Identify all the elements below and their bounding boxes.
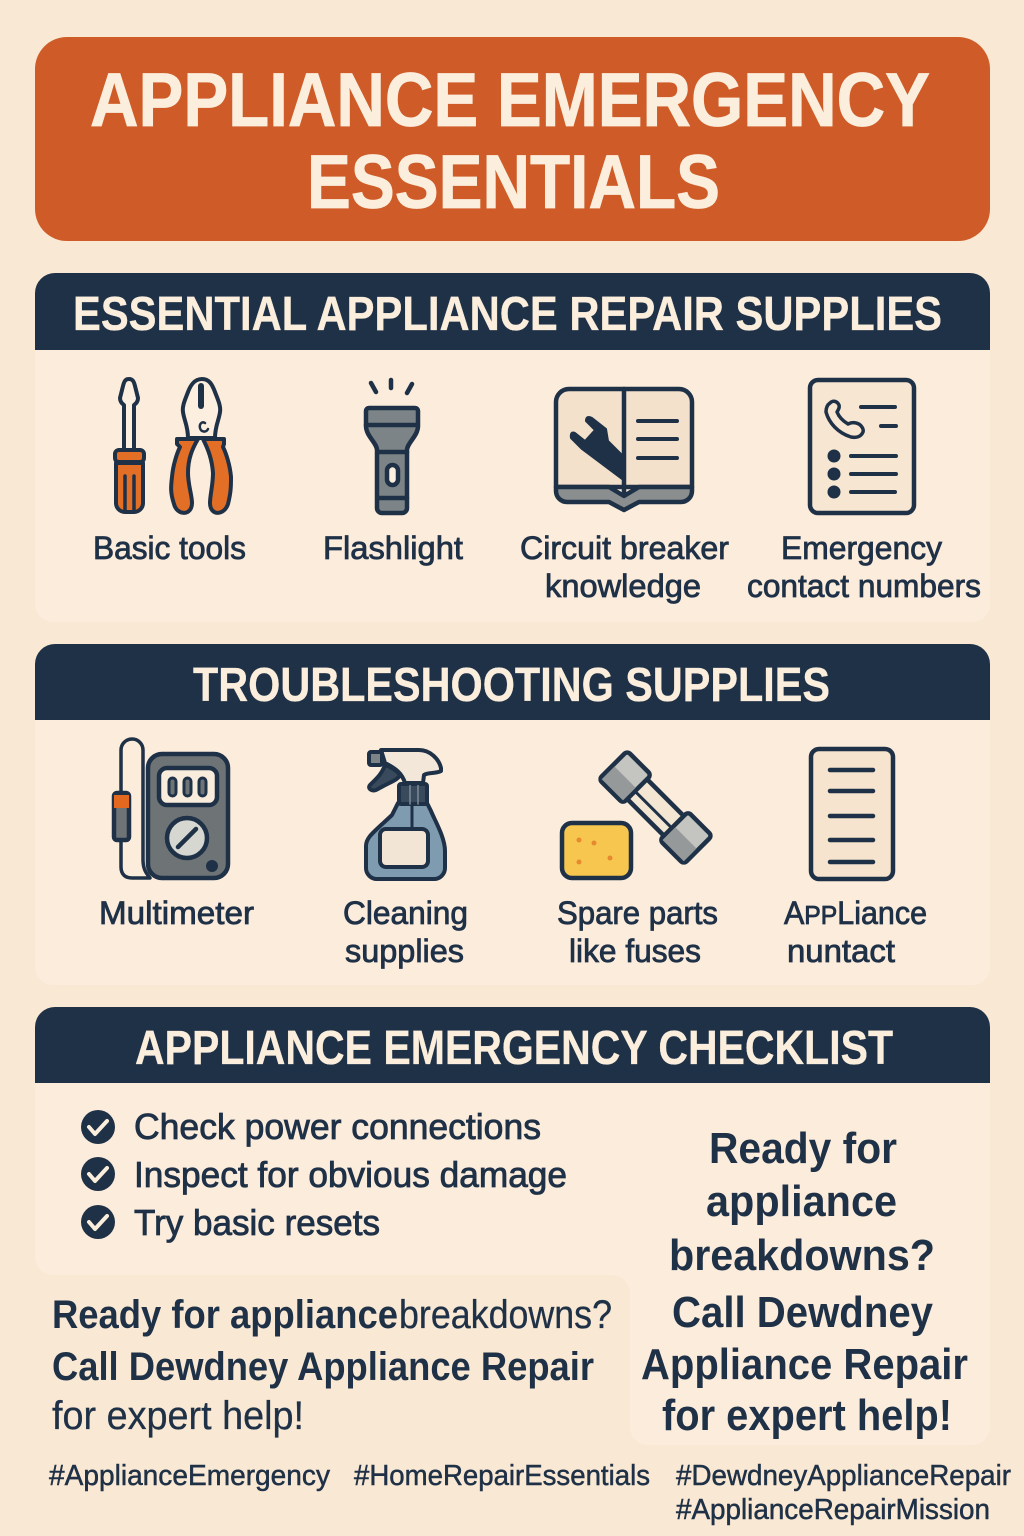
- label: multimeter: Multimeter: [99, 895, 254, 931]
- hashtags: #HomeRepairEssentials: [354, 1460, 650, 1492]
- heading: emergency checklist: [35, 1007, 990, 1083]
- checklist item: inspect for obvious damage: Inspect for obvious damage: [134, 1154, 567, 1195]
- callout: bottom left: for expert help!: [52, 1394, 304, 1438]
- label: circuit breaker knowledge: Circuit breaker: [520, 530, 729, 566]
- panel: troubleshooting supplies: [35, 644, 990, 985]
- callout: bottom left: Call Dewdney Appliance Repair: [52, 1345, 594, 1389]
- hashtags: #ApplianceEmergency: [49, 1460, 330, 1492]
- label: spare parts like fuses: like fuses: [569, 933, 701, 969]
- callout: bottom left: breakdowns?: [399, 1293, 612, 1337]
- title banner: [35, 37, 990, 241]
- label: cleaning supplies: supplies: [345, 933, 464, 969]
- label: circuit breaker knowledge: [520, 530, 729, 604]
- callout: bottom left: Ready for appliance: [52, 1293, 398, 1337]
- heading: emergency checklist: APPLIANCE EMERGENCY CHECKLIST: [135, 1022, 893, 1075]
- label: circuit breaker knowledge: knowledge: [545, 568, 701, 604]
- label: spare parts like fuses: [557, 895, 718, 969]
- panel: essential appliance repair supplies: [35, 273, 990, 622]
- icon: multimeter: [114, 739, 228, 878]
- callout: bottom left: [52, 1293, 612, 1438]
- label: emergency contact numbers: Emergency: [781, 530, 942, 566]
- hashtags: #DewdneyApplianceRepair: [676, 1460, 1011, 1492]
- icon: flashlight: [366, 380, 418, 513]
- label: appliance manual (as printed): APPLiance: [784, 895, 927, 931]
- heading: troubleshooting supplies: [35, 644, 990, 720]
- checklist item: check power connections: Check power connections: [134, 1106, 541, 1147]
- callout: right column: [641, 1124, 968, 1440]
- title banner: APPLIANCE EMERGENCY: [90, 58, 930, 143]
- callout: right column: Call Dewdney: [672, 1288, 933, 1337]
- label: appliance manual (as printed): [784, 895, 927, 969]
- label: cleaning supplies: [343, 895, 468, 969]
- heading: essential supplies: [35, 273, 990, 350]
- callout: right column: Ready for: [709, 1124, 897, 1173]
- icon: sponge and fuse: [562, 751, 712, 878]
- hashtags: #ApplianceRepairMission: [676, 1494, 990, 1526]
- checklist item: try basic resets: Try basic resets: [134, 1202, 380, 1243]
- callout: right column: Appliance Repair: [641, 1340, 968, 1389]
- label: basic tools: Basic tools: [93, 530, 246, 566]
- label: spare parts like fuses: Spare parts: [557, 895, 718, 931]
- panel: appliance emergency checklist: [35, 1007, 990, 1445]
- icon: emergency contact sheet: [810, 380, 914, 513]
- title banner: ESSENTIALS: [307, 140, 720, 225]
- icon: appliance manual page: [811, 749, 893, 879]
- hashtags: [49, 1460, 1011, 1526]
- label: emergency contact numbers: [747, 530, 981, 604]
- icon: screwdriver and pliers: [115, 379, 231, 513]
- label: cleaning supplies: Cleaning: [343, 895, 468, 931]
- label: flashlight: Flashlight: [323, 530, 463, 566]
- callout: right column: for expert help!: [662, 1391, 952, 1440]
- callout: right column: appliance: [706, 1177, 897, 1226]
- icon: repair manual book: [556, 389, 692, 510]
- callout: right column: breakdowns?: [669, 1231, 935, 1280]
- label: emergency contact numbers: contact numbers: [747, 568, 981, 604]
- label: appliance manual (as printed): nuntact: [787, 933, 895, 969]
- heading: troubleshooting supplies: TROUBLESHOOTING SUPPLIES: [193, 659, 830, 712]
- icon: spray bottle: [366, 750, 445, 879]
